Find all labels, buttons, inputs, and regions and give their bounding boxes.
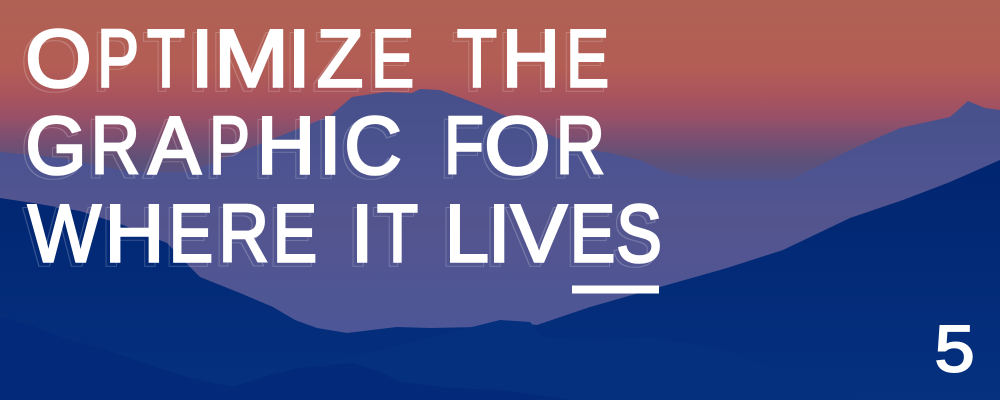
title: offset outline layer: H — [100, 192, 160, 283]
title: white heading: T — [377, 189, 418, 280]
title: white heading — [25, 14, 662, 280]
title: offset outline layer: I — [187, 17, 209, 108]
title: white heading: E — [169, 189, 213, 280]
title: white heading: S — [616, 189, 662, 280]
dark foreground hills — [0, 317, 570, 400]
title: white heading: F — [444, 101, 484, 192]
title: white heading: H — [104, 189, 164, 280]
title: white heading: I — [319, 101, 341, 192]
mid foreground hill — [240, 320, 867, 400]
title: offset outline layer: M — [210, 17, 285, 108]
title: white heading: C — [344, 101, 402, 192]
title: offset outline layer: R — [552, 104, 601, 195]
title: white heading: V — [511, 189, 568, 280]
title: offset outline layer: R — [214, 192, 265, 283]
title: white heading: I — [288, 14, 310, 105]
title: offset outline layer: E — [165, 192, 209, 283]
title: offset outline layer: T — [373, 192, 414, 283]
central and right distant mountains — [190, 89, 1000, 215]
title: white heading: E — [371, 14, 414, 105]
title: white heading: A — [148, 101, 201, 192]
title: white heading: W — [28, 189, 102, 280]
title: white heading: O — [25, 14, 92, 105]
title: offset outline layer: T — [453, 17, 493, 108]
title: offset outline layer: G — [21, 104, 83, 195]
title: offset outline layer: C — [340, 104, 398, 195]
title: offset outline layer: O — [480, 104, 547, 195]
title: offset outline layer: P — [205, 104, 246, 195]
title: white heading: E — [273, 189, 317, 280]
title: white heading: R — [91, 101, 140, 192]
title: offset outline layer: I — [484, 192, 506, 283]
title: white heading: P — [209, 101, 250, 192]
title: white heading: I — [488, 189, 510, 280]
title: white heading: R — [218, 189, 269, 280]
title: offset outline layer: O — [21, 17, 88, 108]
title: white heading: R — [556, 101, 605, 192]
title: offset outline layer: E — [269, 192, 313, 283]
title: white heading: P — [97, 14, 139, 105]
title: white heading: M — [214, 14, 289, 105]
title: offset outline layer: S — [612, 192, 658, 283]
title: offset outline layer: E — [562, 17, 605, 108]
title: offset outline layer: T — [143, 17, 181, 108]
title: offset outline layer: H — [498, 17, 556, 108]
title: white heading: L — [445, 189, 489, 280]
title: offset outline layer: W — [24, 192, 98, 283]
title: white heading: E — [570, 189, 615, 280]
title: offset outline layer: Z — [313, 17, 359, 108]
title: white heading: H — [257, 101, 315, 192]
title: offset outline layer: I — [347, 192, 369, 283]
title: offset outline layer — [21, 17, 658, 283]
title: white heading: G — [25, 101, 87, 192]
title: white heading: T — [147, 14, 185, 105]
title: offset outline layer: F — [440, 104, 480, 195]
dark left and right ridge — [0, 160, 1000, 400]
far left haze ridge — [0, 152, 300, 215]
title: offset outline layer: A — [144, 104, 197, 195]
title: offset outline layer: I — [284, 17, 306, 108]
title: offset outline layer: H — [253, 104, 311, 195]
title: offset outline layer: E — [566, 192, 611, 283]
title: white heading: I — [191, 14, 213, 105]
title: white heading: Z — [317, 14, 363, 105]
title: offset outline layer: I — [315, 104, 337, 195]
title: offset outline layer: V — [507, 192, 564, 283]
title: offset outline layer: P — [93, 17, 135, 108]
title: offset outline layer: R — [87, 104, 136, 195]
title: offset outline layer: L — [441, 192, 485, 283]
title: white heading: O — [484, 101, 551, 192]
title: offset outline layer: E — [367, 17, 410, 108]
underline accent — [572, 286, 659, 294]
page number: 5 — [935, 312, 975, 386]
title: white heading: I — [351, 189, 373, 280]
title: white heading: T — [457, 14, 497, 105]
title: white heading: E — [566, 14, 609, 105]
title: white heading: H — [502, 14, 560, 105]
